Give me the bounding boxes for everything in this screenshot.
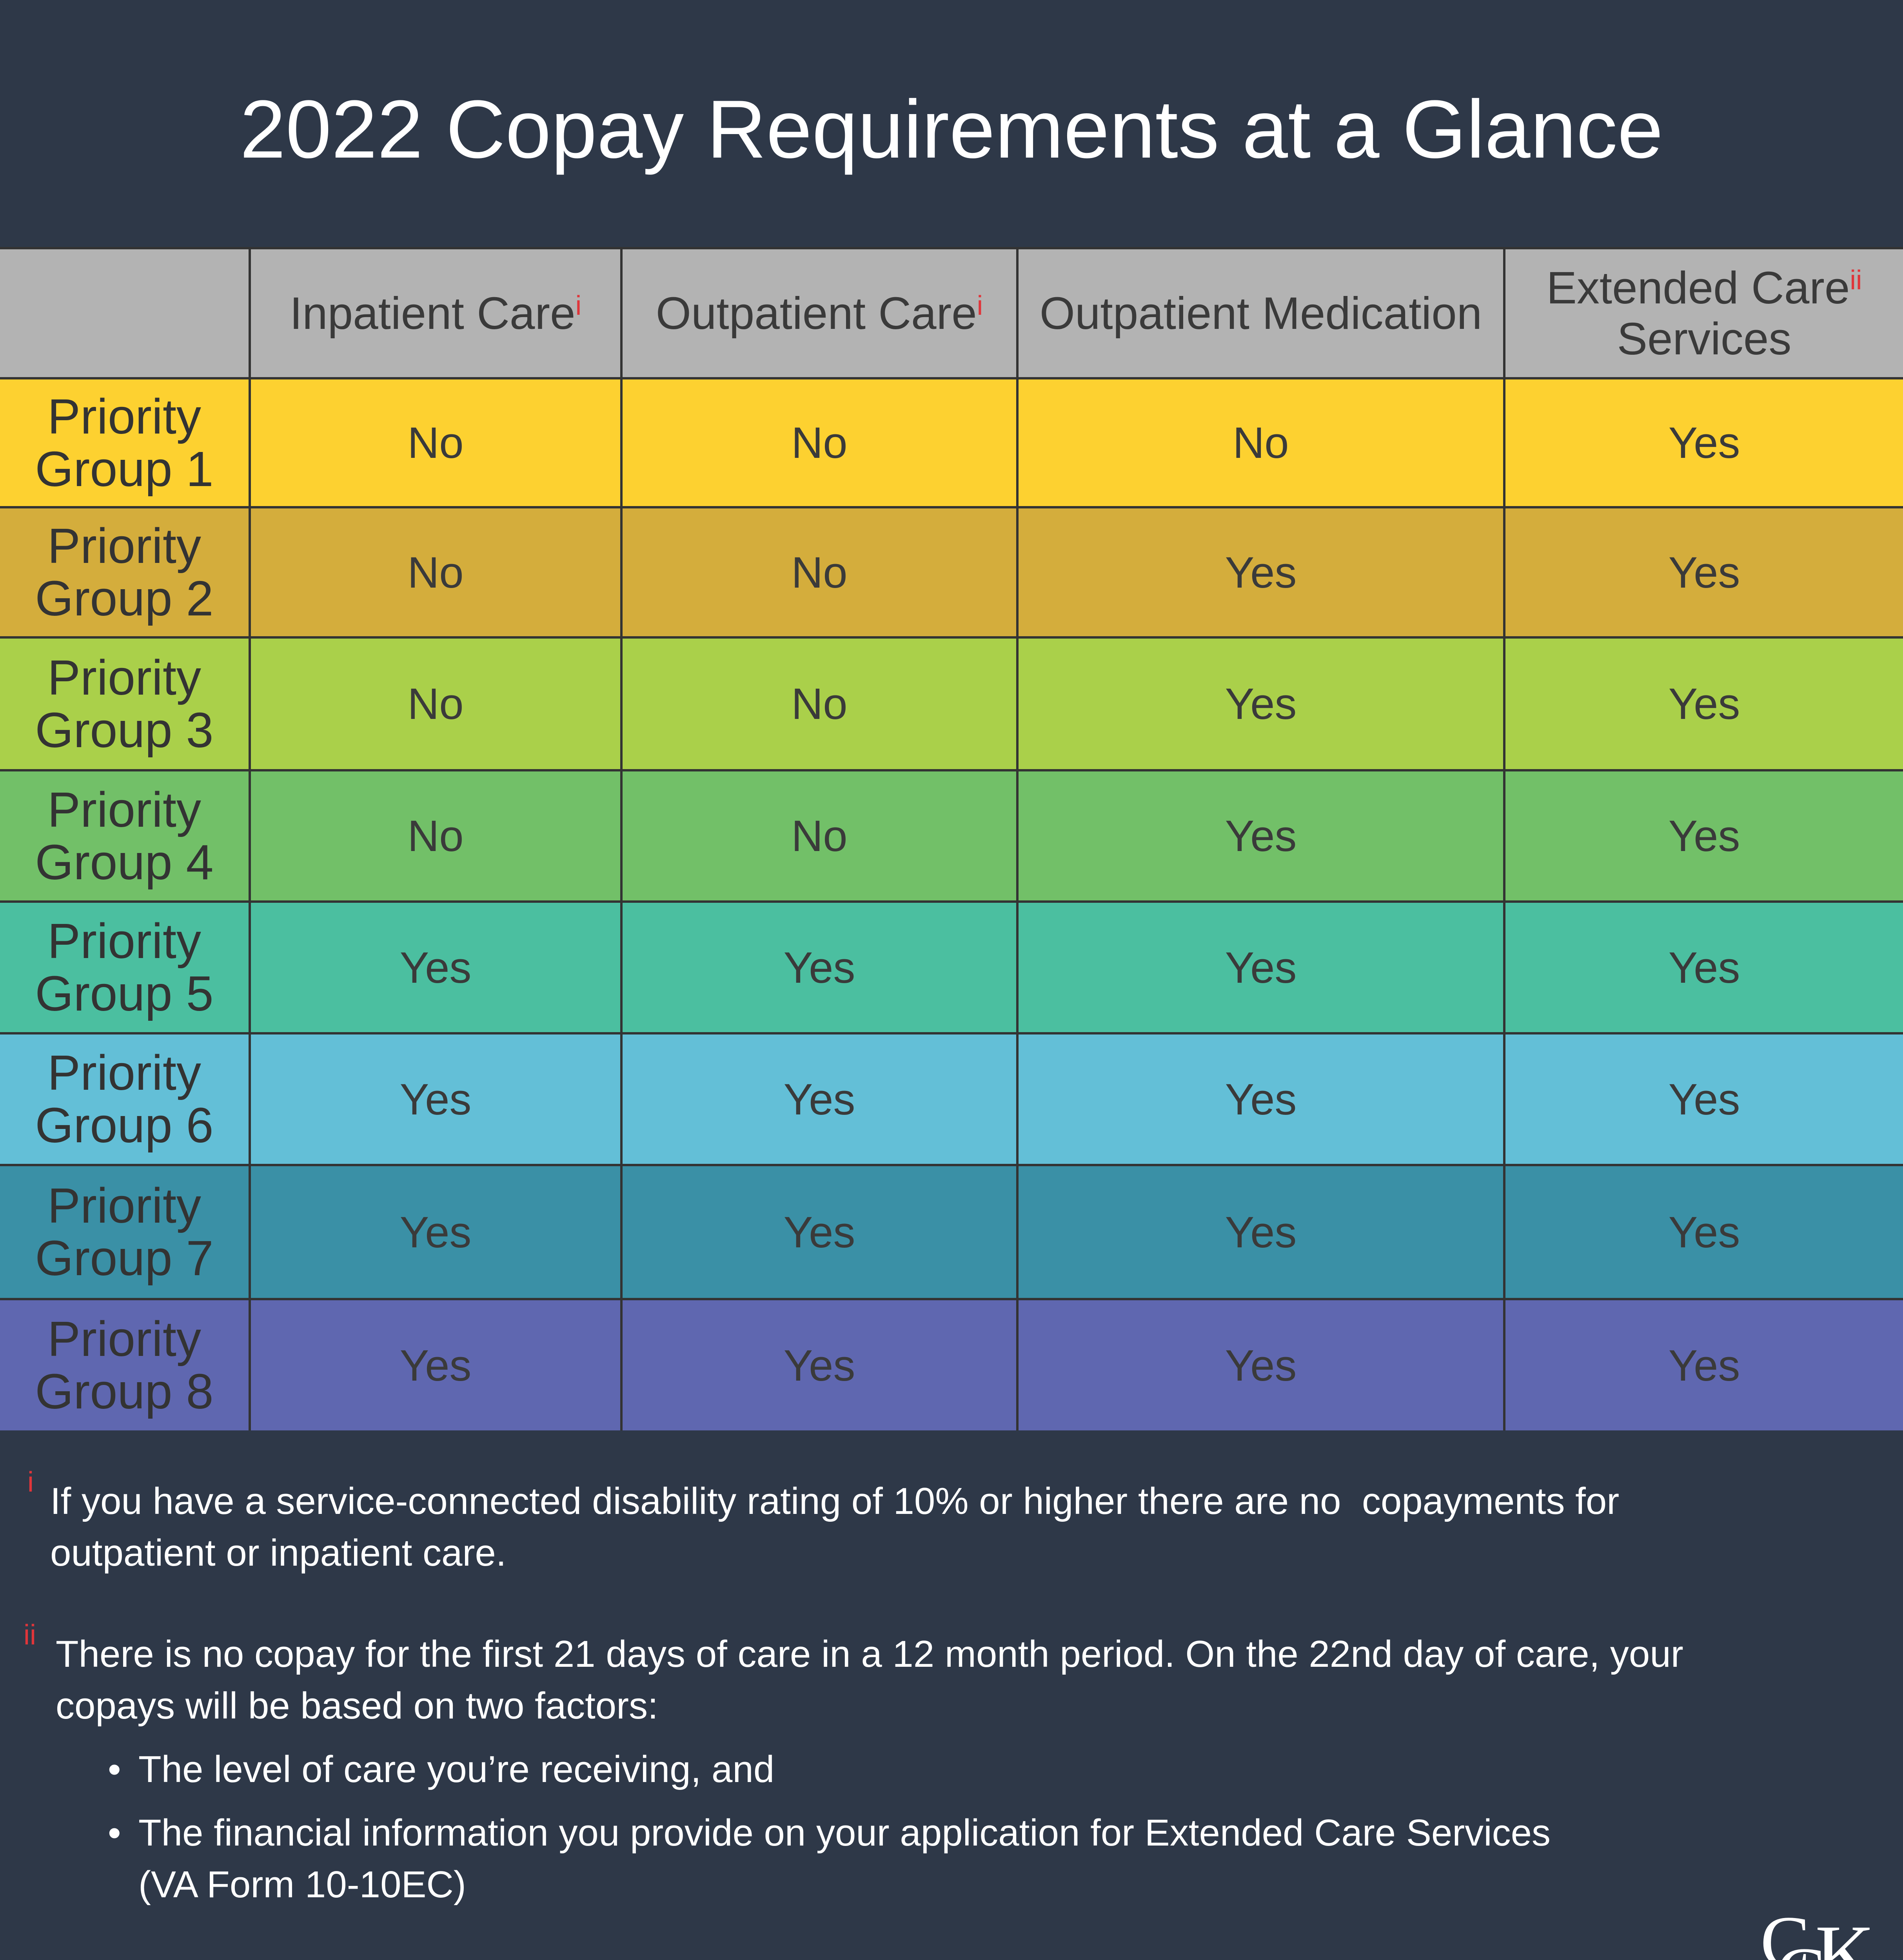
footnote ii: (VA Form 10-10EC) bbox=[138, 1864, 466, 1906]
header row: Outpatient Medication bbox=[1040, 288, 1482, 339]
row: group 1 bbox=[0, 379, 1903, 508]
row: group 6: Yes bbox=[400, 1075, 471, 1123]
row: group 4 bbox=[0, 771, 1903, 903]
footnote ii: ii bbox=[24, 1619, 36, 1651]
footnote ii: • bbox=[108, 1748, 121, 1790]
row: group 8: Yes bbox=[784, 1341, 855, 1390]
row: group 7: Yes bbox=[784, 1207, 855, 1257]
row: group 5: Yes bbox=[784, 943, 855, 992]
row: group 1: No bbox=[791, 418, 848, 467]
row: group 6: Yes bbox=[1669, 1075, 1740, 1123]
row: group 4: No bbox=[791, 811, 848, 860]
table bbox=[0, 247, 1903, 1428]
row: group 1: No bbox=[407, 418, 464, 467]
footnote ii: The level of care you’re receiving, and bbox=[138, 1748, 774, 1790]
row: group 6: Yes bbox=[784, 1075, 855, 1123]
row: group 8 bbox=[0, 1300, 1903, 1430]
row: group 6: Priority bbox=[47, 1045, 201, 1100]
row: group 1: Priority bbox=[47, 389, 201, 444]
row: group 7 bbox=[0, 1166, 1903, 1300]
row: group 4: Priority bbox=[47, 782, 201, 837]
header row: Extended Careii bbox=[1547, 262, 1862, 313]
footnote ii: copays will be based on two factors: bbox=[56, 1685, 658, 1727]
row: group 2 bbox=[0, 508, 1903, 639]
footnote i bbox=[0, 1466, 1903, 1584]
row: group 8: Yes bbox=[400, 1341, 471, 1390]
row: group 3: Yes bbox=[1225, 679, 1297, 728]
row: group 4: Yes bbox=[1669, 811, 1740, 860]
row: group 7: Yes bbox=[400, 1207, 471, 1257]
row: group 3: Yes bbox=[1669, 679, 1740, 728]
row: group 5: Yes bbox=[400, 943, 471, 992]
footnote ii: The financial information you provide on your application for Extended Care Services bbox=[138, 1812, 1551, 1854]
row: group 4: Yes bbox=[1225, 811, 1297, 860]
row: group 3 bbox=[0, 639, 1903, 771]
row: group 5: Yes bbox=[1669, 943, 1740, 992]
row: group 2: Yes bbox=[1669, 548, 1740, 597]
row: group 2: Yes bbox=[1225, 548, 1297, 597]
header row: Inpatient Carei bbox=[290, 288, 581, 339]
row: group 2: No bbox=[791, 548, 848, 597]
row: group 6: Yes bbox=[1225, 1075, 1297, 1123]
row: group 2: Priority bbox=[47, 518, 201, 573]
footnote i: i bbox=[27, 1466, 34, 1498]
footnote ii: • bbox=[108, 1812, 121, 1854]
row: group 8: Group 8 bbox=[35, 1364, 214, 1419]
header row bbox=[0, 249, 1903, 379]
footnote i: If you have a service-connected disability rating of 10% or higher there are no copayments for bbox=[50, 1480, 1619, 1522]
footnote i: outpatient or inpatient care. bbox=[50, 1532, 506, 1574]
logo bbox=[1760, 1905, 1894, 1960]
row: group 3: No bbox=[791, 679, 848, 728]
row: group 6: Group 6 bbox=[35, 1098, 214, 1153]
row: group 2: No bbox=[407, 548, 464, 597]
row: group 7: Yes bbox=[1669, 1207, 1740, 1257]
header row: Outpatient Carei bbox=[656, 288, 983, 339]
row: group 5: Priority bbox=[47, 913, 201, 969]
footnote ii: There is no copay for the first 21 days of care in a 12 month period. On the 22nd day of care, your bbox=[56, 1633, 1683, 1675]
row: group 8: Yes bbox=[1669, 1341, 1740, 1390]
row: group 1: Yes bbox=[1669, 418, 1740, 467]
row: group 2: Group 2 bbox=[35, 571, 214, 626]
row: group 8: Yes bbox=[1225, 1341, 1297, 1390]
row: group 7: Priority bbox=[47, 1178, 201, 1233]
row: group 1: No bbox=[1233, 418, 1289, 467]
row: group 7: Yes bbox=[1225, 1207, 1297, 1257]
footnote ii bbox=[0, 1619, 1903, 1917]
row: group 3: No bbox=[407, 679, 464, 728]
title: 2022 Copay Requirements at a Glance bbox=[240, 83, 1663, 175]
row: group 3: Priority bbox=[47, 650, 201, 705]
row: group 6 bbox=[0, 1034, 1903, 1166]
row: group 5: Group 5 bbox=[35, 966, 214, 1021]
row: group 4: Group 4 bbox=[35, 834, 214, 890]
row: group 4: No bbox=[407, 811, 464, 860]
row: group 8: Priority bbox=[47, 1311, 201, 1367]
header row: Services bbox=[1617, 313, 1791, 364]
row: group 5 bbox=[0, 903, 1903, 1034]
row: group 1: Group 1 bbox=[35, 441, 214, 496]
row: group 7: Group 7 bbox=[35, 1230, 214, 1286]
row: group 5: Yes bbox=[1225, 943, 1297, 992]
row: group 3: Group 3 bbox=[35, 702, 214, 757]
